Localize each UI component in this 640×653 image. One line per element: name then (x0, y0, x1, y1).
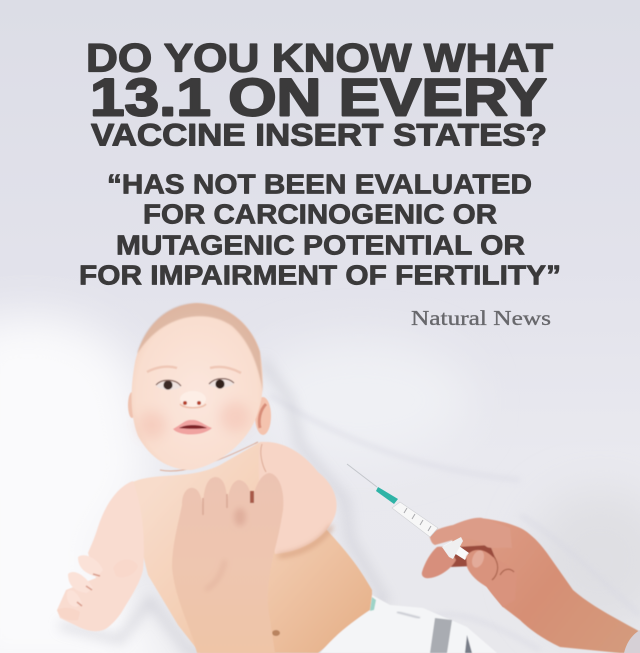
quote line 4: FOR IMPAIRMENT OF FERTILITY” (79, 260, 561, 291)
barrel (392, 502, 438, 537)
quote line 2: FOR CARCINOGENIC OR (143, 199, 497, 230)
thumbnail (470, 549, 486, 569)
title (86, 36, 553, 152)
back of hand and wrist (450, 518, 640, 653)
baby right arm (259, 442, 337, 554)
tendon shading (205, 560, 225, 590)
middle finger (422, 547, 456, 578)
diaper (320, 595, 497, 653)
baby torso (133, 442, 372, 653)
source: Natural News: Natural News (411, 306, 551, 330)
shadow under right arm (278, 526, 332, 556)
baby left arm and hand (57, 481, 144, 631)
bracelet (624, 630, 640, 653)
baby hair (137, 303, 263, 392)
index finger (430, 518, 512, 548)
nurse hand behind syringe (422, 518, 640, 653)
baby head (132, 303, 263, 470)
baby right ear (255, 397, 271, 435)
quote (79, 169, 561, 291)
adult hand holding baby (172, 473, 283, 653)
baby (57, 303, 497, 653)
barrel markings (404, 508, 431, 531)
title line 2: 13.1 ON EVERY (90, 68, 547, 128)
nurse thumb (466, 549, 517, 607)
crease under chin (160, 442, 266, 472)
title line 1: DO YOU KNOW WHAT (86, 36, 553, 80)
baby belly button (272, 630, 280, 636)
baby cheeks (138, 402, 250, 439)
thumb creases (492, 557, 514, 580)
knuckle shadow (234, 508, 246, 526)
mouth (173, 420, 212, 435)
baby left ear (128, 392, 136, 418)
needle hub (376, 487, 398, 504)
dark gap between fingers (440, 545, 498, 567)
quote line 3: MUTAGENIC POTENTIAL OR (116, 230, 525, 261)
title line 3: VACCINE INSERT STATES? (91, 116, 547, 152)
flange (442, 537, 463, 559)
nose (180, 391, 206, 408)
quote line 1: “HAS NOT BEEN EVALUATED (107, 169, 532, 200)
finger gaps (250, 491, 254, 503)
plunger (443, 541, 469, 560)
eyebrows (147, 367, 241, 373)
right eye (209, 379, 234, 389)
syringe (347, 464, 469, 560)
needle (347, 464, 377, 487)
left eye (156, 380, 181, 390)
shadow under baby (60, 360, 385, 653)
